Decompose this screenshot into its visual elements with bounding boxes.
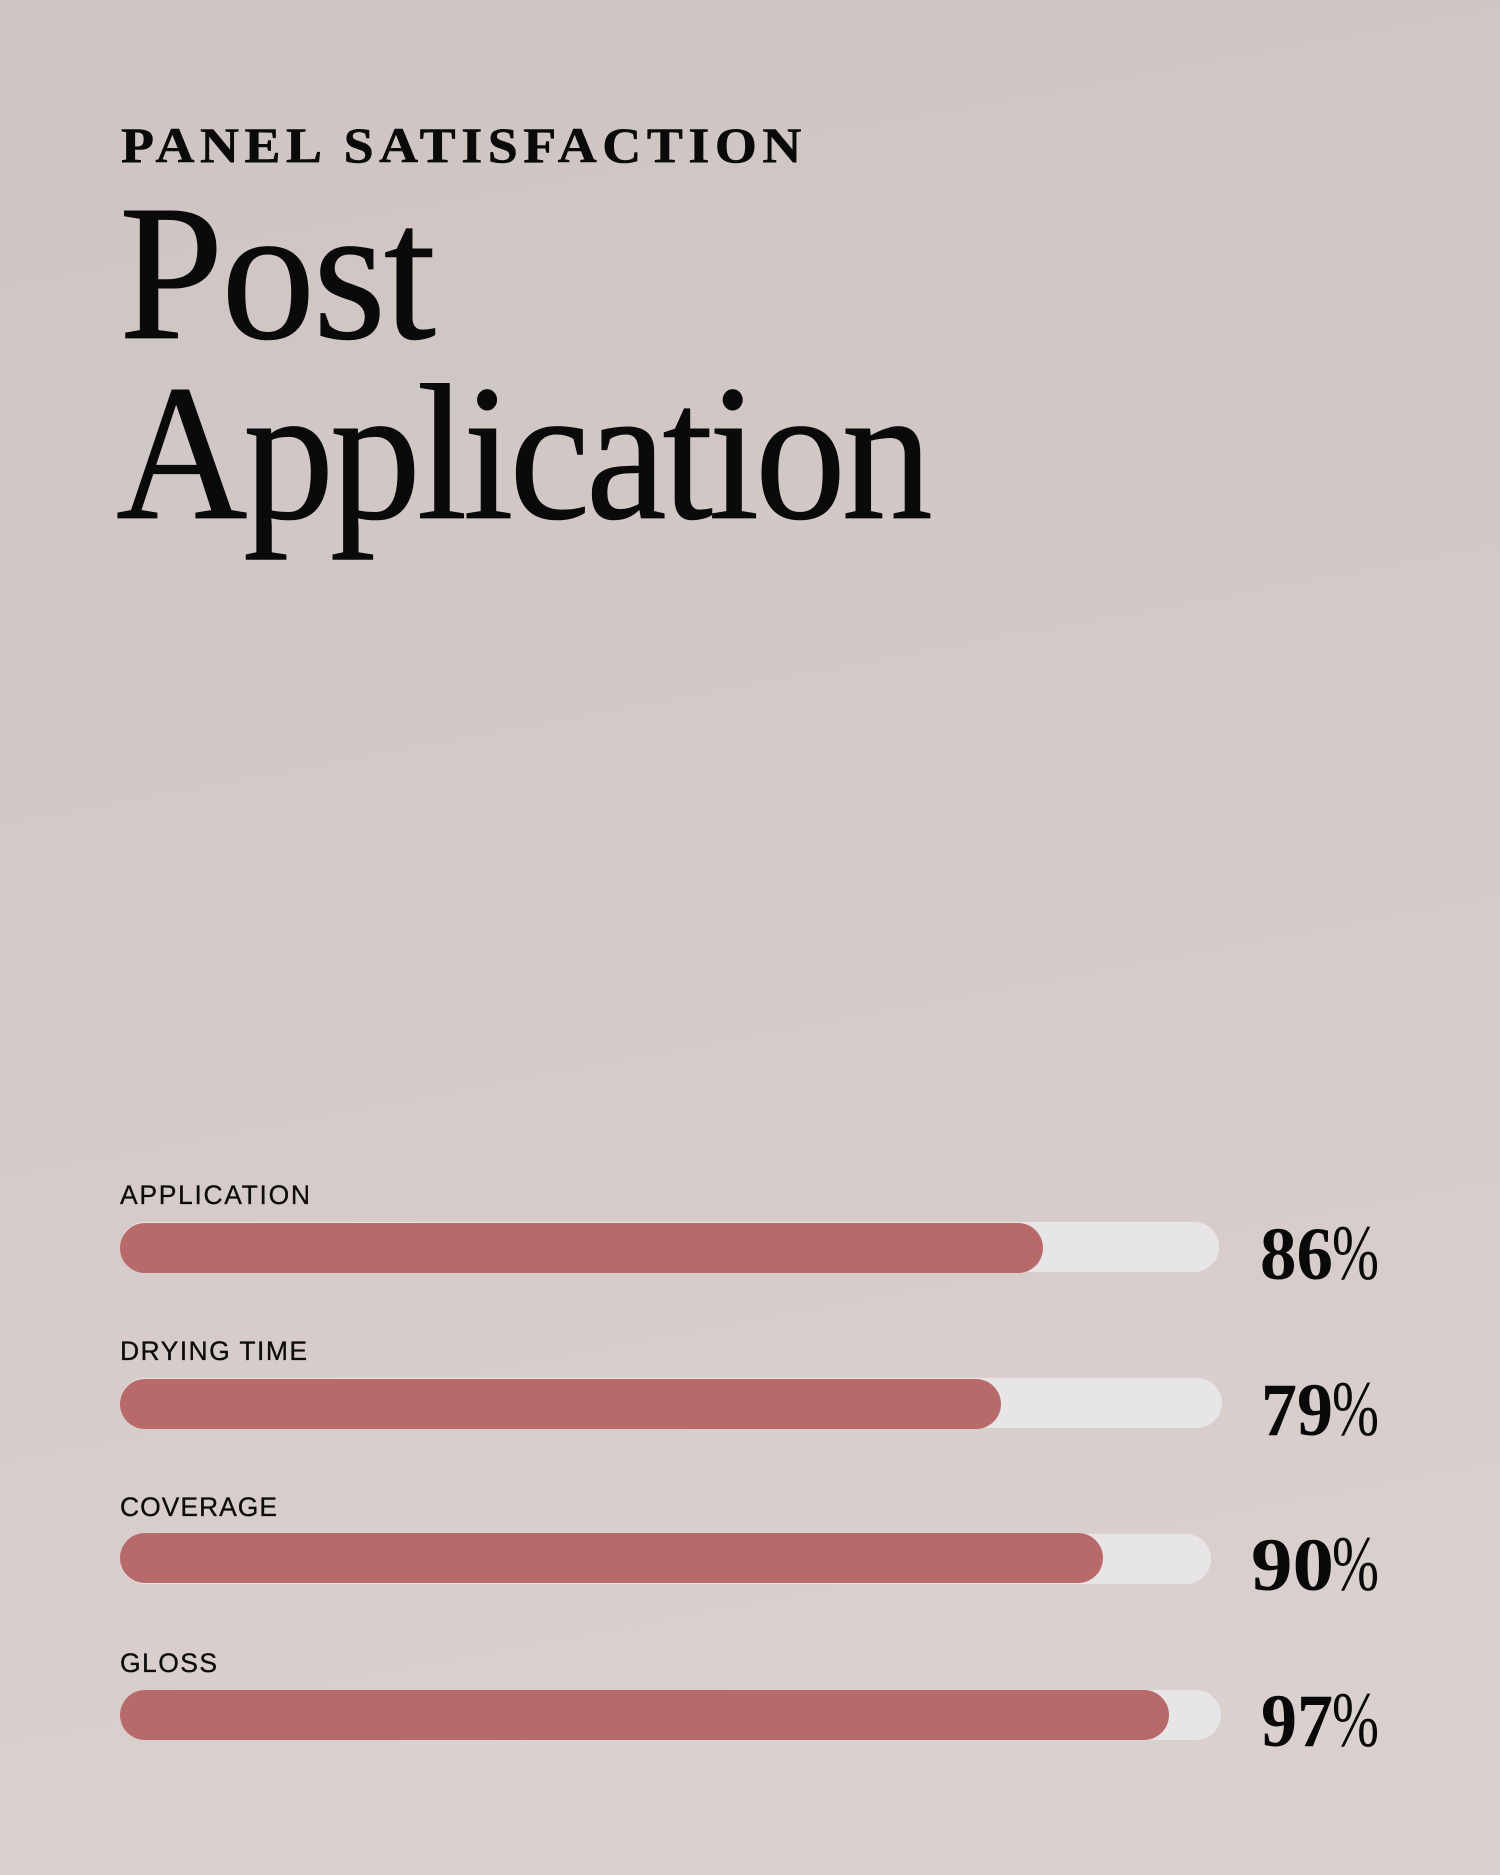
row: coverage 90%: % [1332,1520,1379,1607]
row: coverage 90%: COVERAGE [120,1492,277,1522]
row: drying time 79%: % [1332,1365,1379,1452]
main title: Application [116,345,931,560]
row: gloss 97%: 97 [1261,1680,1333,1763]
row: application 86%: 86 [1260,1213,1333,1296]
row: gloss 97%: GLOSS [120,1648,217,1678]
row: application 86%: % [1332,1209,1379,1296]
eyebrow heading: PANEL SATISFACTION [121,119,801,174]
row: drying time 79%: DRYING TIME [120,1336,307,1366]
row: application 86% [120,1180,1379,1296]
main title: Post [119,166,435,381]
row: coverage 90% [120,1492,1379,1607]
row: gloss 97% [120,1648,1379,1763]
row: application 86%: APPLICATION [120,1180,310,1210]
row: drying time 79%: 79 [1261,1369,1333,1452]
row: coverage 90%: 90 [1251,1524,1334,1607]
row: drying time 79% [120,1336,1379,1452]
bar chart: satisfaction scores [120,1180,1379,1763]
main title [116,166,931,560]
row: gloss 97%: % [1332,1676,1379,1763]
